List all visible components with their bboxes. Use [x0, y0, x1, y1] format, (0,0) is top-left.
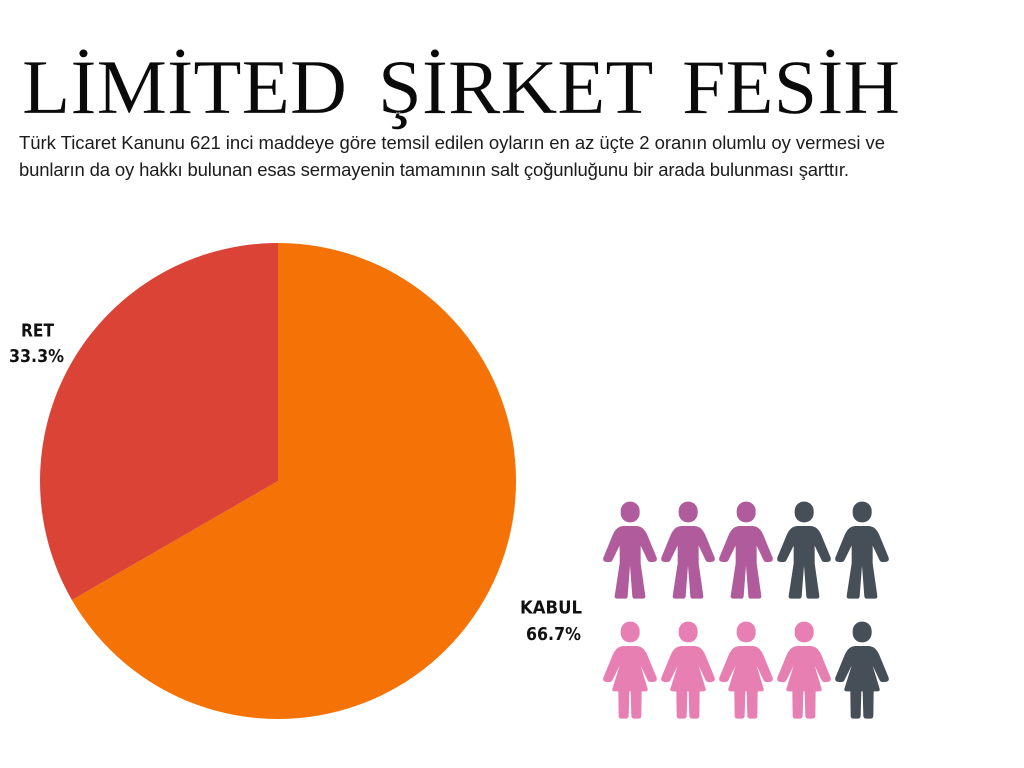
icon: woman pink 1 — [603, 622, 657, 719]
title: ŞİRKET — [378, 44, 652, 130]
icon: man purple 3 — [719, 502, 773, 599]
label: KABUL 66.7% — [520, 598, 582, 645]
label: KABUL 66.7%: 66.7% — [526, 625, 581, 645]
icon: man dark 4 — [777, 502, 831, 599]
label: RET 33.3%: 33.3% — [9, 347, 64, 367]
icon: woman pink 4 — [777, 622, 831, 719]
icon: man purple 1 — [603, 502, 657, 599]
description text — [19, 132, 885, 180]
icon row: women — [603, 622, 889, 719]
icon: woman pink 3 — [719, 622, 773, 719]
icon: woman pink 2 — [661, 622, 715, 719]
icon: man dark 5 — [835, 502, 889, 599]
label: KABUL 66.7%: KABUL — [520, 598, 582, 618]
label: RET 33.3%: RET — [21, 322, 54, 342]
pie chart — [40, 243, 516, 719]
pie slice: RET 33.3% — [40, 243, 278, 600]
description text: Türk Ticaret Kanunu 621 inci maddeye göre temsil edilen oyların en az üçte 2 oranın olumlu oy vermesi ve — [19, 132, 885, 153]
description text: bunların da oy hakkı bulunan esas sermayenin tamamının salt çoğunluğunu bir arada bulunması şarttır. — [19, 159, 849, 180]
title: LİMİTED — [22, 44, 347, 130]
label: RET 33.3% — [9, 322, 64, 367]
pie slice: KABUL 66.7% — [72, 243, 516, 719]
icon: man purple 2 — [661, 502, 715, 599]
icon row: men — [603, 502, 889, 599]
icon: woman dark 5 — [835, 622, 889, 719]
title: FESİH — [682, 44, 900, 130]
